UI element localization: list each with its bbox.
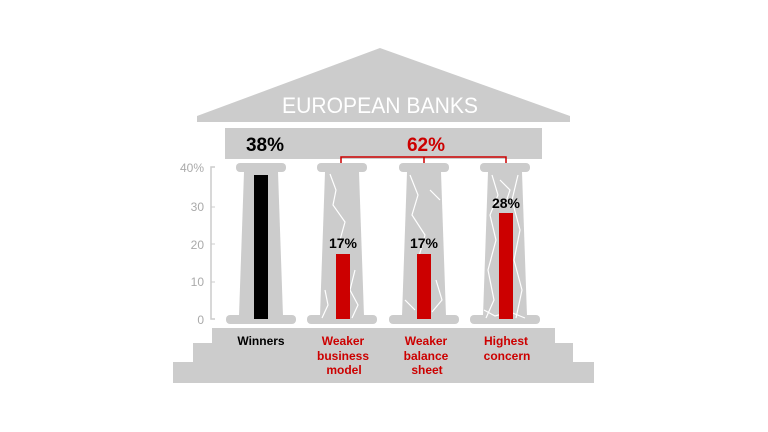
label: concern total: 62%	[407, 135, 445, 156]
category labels: balance	[404, 349, 449, 363]
steps	[173, 328, 594, 383]
category labels: Weaker	[405, 334, 448, 348]
title: EUROPEAN BANKS	[282, 93, 478, 118]
category labels: model	[326, 363, 362, 377]
y axis: 20	[191, 238, 204, 252]
category labels: sheet	[411, 363, 443, 377]
entablature	[225, 128, 542, 159]
y axis: 10	[191, 275, 204, 289]
category labels: concern	[484, 349, 530, 363]
category labels: Highest	[484, 334, 528, 348]
category labels	[237, 334, 530, 377]
label: winners total: 38%	[246, 135, 284, 156]
bars	[254, 175, 513, 319]
category labels: Winners	[237, 334, 285, 348]
y axis: 40%	[180, 161, 204, 175]
bar values: 17%	[329, 235, 358, 251]
columns	[226, 163, 540, 324]
y axis: 30	[191, 200, 204, 214]
y axis: 0	[197, 313, 204, 327]
cracks	[322, 174, 525, 318]
category labels: Weaker	[322, 334, 365, 348]
bracket	[341, 157, 506, 170]
category labels: business	[317, 349, 369, 363]
bar values: 28%	[492, 195, 521, 211]
roof	[197, 48, 570, 122]
y axis	[180, 161, 215, 327]
bar values	[329, 195, 521, 251]
bar values: 17%	[410, 235, 439, 251]
